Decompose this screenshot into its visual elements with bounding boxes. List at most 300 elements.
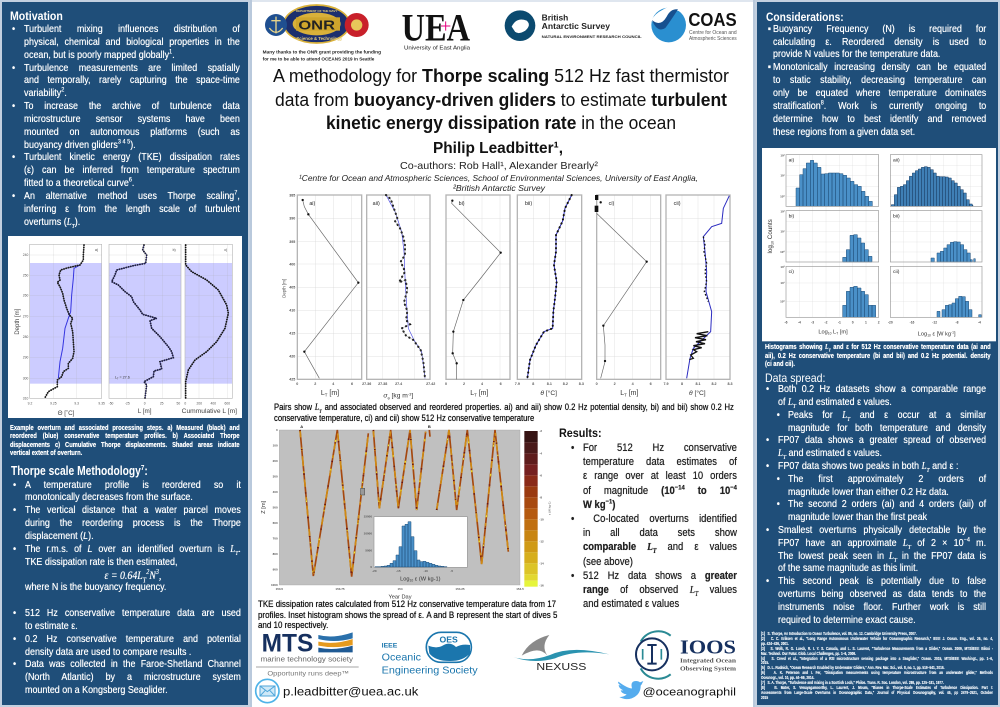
chart: histograms of LT and epsilon: 10 — [770, 241, 774, 245]
text block: Thorpe scale method bullets: 512 Hz conservative temperature data are used — [25, 608, 241, 619]
plot a: temperature profiles: 280 — [23, 335, 28, 339]
chart: histograms of LT and epsilon: 10¹ — [780, 230, 784, 234]
heading: Motivation: Motivation — [10, 9, 63, 23]
plot cii: 8.3 — [727, 382, 733, 386]
chart: TKE dissipation rate section: 154.5 — [516, 587, 524, 591]
text block: motivation bullets: inferring ε from the length scale of turbulent — [24, 204, 240, 215]
plot b: Thorpe displacements: 50 — [176, 401, 180, 405]
text block: motivation bullets: mounted on autonomous platforms (such as — [24, 127, 240, 138]
text block: Thorpe scale method bullets: where N is the buoyancy frequency. — [25, 582, 166, 593]
chart: TKE dissipation rate section: 800 — [273, 552, 278, 556]
logo: ONR — [263, 5, 381, 61]
plot cii: θ [°C] — [689, 389, 706, 397]
text block: motivation bullets: An alternative method uses Thorpe scaling7, — [24, 190, 240, 202]
logo: British Antarctic Survey — [505, 10, 643, 41]
histogram ai: ai) — [788, 158, 794, 164]
text block: results bullets: and estimated ε values — [583, 598, 679, 610]
chart: histograms of LT and epsilon: 10⁰ — [780, 195, 785, 199]
plot ai: 390 — [289, 217, 295, 221]
chart: TKE dissipation rate section: 300 — [273, 474, 278, 478]
plot bi: 0 — [445, 382, 447, 386]
logo: IEEE Oceanic Engineering Society — [382, 632, 479, 676]
logo: ONR: Many thanks to the ONR grant providing the funding — [263, 50, 381, 55]
plot b: Thorpe displacements: = 27.6 — [118, 376, 130, 380]
text block: considerations bullets: Buoyancy Frequency (N) is required for — [773, 24, 986, 35]
plot c: cumulative Thorpe displacements: 400 — [211, 401, 216, 405]
panel: centre column: • — [571, 570, 574, 582]
caption: dissipation section: and 10 respectively. — [258, 619, 328, 630]
text block: motivation bullets: (ε) can be inferred from temperature spectrum — [24, 165, 240, 176]
text block: Thorpe scale method bullets: Data was collected in the Faroe-Shetland Channel — [25, 659, 241, 670]
colour bar: -14 — [539, 561, 544, 565]
panel: right column: ▪ — [768, 24, 771, 35]
icon: twitter bird — [618, 681, 643, 699]
chart: histograms of LT and epsilon: -3 — [811, 321, 814, 325]
text block: motivation bullets: overturns (LT). — [24, 217, 80, 230]
logo: NEXUSS: NEXUSS — [536, 662, 586, 673]
text block: Thorpe scale method bullets: mounted on a Kongsberg Seaglider. — [25, 685, 168, 696]
logo: ONR: Science & Technology — [296, 36, 343, 41]
text block: results bullets: comparable LT and ε values — [583, 541, 737, 556]
text block: Thorpe scale method bullets: The vertical distance that a water parcel moves — [25, 505, 241, 516]
co-authors: Co-authors: Rob Hall¹, Alexander Brearly² — [400, 160, 599, 172]
caption: histograms: aii), 0.2 Hz conservative temperature (bi and bii) and 0.2 Hz potential. density — [765, 351, 991, 360]
references list: [8] B. Mater, S. Venayagamoorthy, L. Laurent, J. Moum, "Biases in Thorpe-Scale Estimates of Turbulence Dissipation. Part I: — [761, 685, 993, 690]
plot bi: 4 — [481, 382, 484, 386]
plot bii: 8.2 — [563, 382, 568, 386]
chart: TKE dissipation rate section: 0 — [276, 428, 278, 432]
histogram ai — [786, 155, 878, 207]
inset histogram of epsilon: -15 — [396, 569, 401, 573]
heading: Considerations: Considerations: — [766, 10, 844, 24]
text block: motivation bullets: and temporally, rarely capturing the space-time — [24, 75, 240, 86]
plot c: cumulative Thorpe displacements: 200 — [197, 401, 202, 405]
chart: TKE dissipation rate section: 153.5 — [276, 587, 283, 591]
panel: left column: • — [13, 608, 16, 619]
plot aii: σ — [383, 393, 388, 400]
plot a: temperature profiles: 270 — [23, 314, 28, 318]
text block: motivation bullets: Turbulent kinetic energy (TKE) dissipation rates — [24, 152, 240, 163]
glider dive tracks — [300, 430, 508, 577]
panel: left column: • — [13, 480, 16, 491]
heading: Thorpe scale Methodology: Thorpe scale Methodology7: — [11, 463, 148, 478]
title — [273, 65, 729, 133]
plot cii: 8.2 — [711, 382, 717, 386]
chart: histograms of LT and epsilon: Log — [917, 332, 927, 338]
logo: ONR: ONR — [298, 18, 335, 32]
text block: motivation bullets: physical, chemical and biological properties in the — [24, 37, 240, 48]
text block: data spread bullets: Smallest overturns physically detectable by the — [778, 525, 986, 536]
colour bar: -6 — [539, 473, 542, 477]
text block: Thorpe scale method bullets: The r.m.s. of L over an identified overturn is LT. — [25, 544, 241, 557]
chart: histograms of LT and epsilon: 10 — [827, 332, 831, 336]
chart: example overturn processing steps — [8, 236, 242, 418]
text block: motivation bullets: Turbulence measurements are limited spatially — [24, 63, 240, 74]
plot a: temperature profiles: 9.35 — [98, 401, 105, 405]
plot ci: T — [624, 393, 627, 398]
caption: dissipation section — [258, 598, 558, 630]
histogram ci — [786, 267, 878, 318]
logo: IOOS: Integrated Ocean — [680, 659, 737, 665]
logo: British Antarctic Survey: Antarctic Survey — [542, 21, 610, 31]
caption: profile pairs: Pairs show LT and associated observed and reordered properties. ai) and aii) show 0.2 Hz potential density, bi) and bii) show 0.2 Hz — [274, 402, 734, 415]
chart: histograms of LT and epsilon: 0 — [851, 321, 853, 325]
plot ci: 2 — [614, 382, 616, 386]
logo: British Antarctic Survey: NATURAL ENVIRONMENT RESEARCH COUNCIL — [542, 35, 643, 39]
plot ai: L — [321, 390, 325, 397]
panel: left column: • — [12, 24, 15, 35]
caption: histograms — [764, 342, 991, 368]
histogram bi: bi) — [788, 214, 794, 220]
logo: IEEE Oceanic Engineering Society: Oceanic — [382, 652, 421, 663]
sponsor logos row — [262, 4, 737, 61]
text block: results bullets: For 512 Hz conservative — [583, 442, 737, 454]
plot ai: 395 — [289, 240, 295, 244]
chart: histograms of LT and epsilon: -20 — [888, 321, 893, 325]
text block: data spread bullets: FP07 have an approximate LT of 2 × 10−4 m. — [778, 536, 986, 551]
text block: results bullets: ε range over at least 10 orders — [583, 470, 737, 482]
chart: histograms of LT and epsilon: -12 — [932, 321, 937, 325]
text block: Thorpe scale method bullets — [13, 480, 241, 696]
plot ci: 4 — [632, 382, 635, 386]
chart: TKE dissipation rate section: A — [300, 424, 303, 429]
plot b: Thorpe displacements: 0 — [144, 401, 146, 405]
references list: [4] S. Creed et al., "Integration of a RSI microstructure sensing package into a Seaglider," Ocean. 2015, MTS/IEEE Washingt., pp. 1–6, — [761, 656, 993, 661]
text block: results bullets: 512 Hz data shows a greater — [583, 570, 737, 582]
text block: motivation bullets: To increase the archive of turbulence data — [24, 101, 240, 112]
title: A methodology for Thorpe scaling 512 Hz fast thermistor — [273, 65, 729, 86]
logo: NEXUSS — [513, 635, 609, 673]
colour bar: -12 — [539, 539, 544, 543]
partner logos and contacts — [254, 630, 737, 704]
chart: histograms of LT and epsilon: 10² — [780, 210, 784, 214]
chart: histograms of LT and epsilon: ] — [954, 332, 956, 338]
text block: considerations bullets — [768, 24, 986, 138]
plot aii: 27.42 — [426, 382, 435, 386]
panel: left column — [0, 0, 250, 707]
text block: considerations bullets: stratification8. Work is currently ongoing to — [773, 100, 986, 112]
chart: histograms of LT and epsilon: -1 — [951, 331, 954, 335]
plot aii: θ — [387, 395, 390, 400]
references list: 2015. — [761, 660, 769, 665]
references list: 2015 — [761, 695, 768, 700]
inset histogram of epsilon: -5 — [450, 569, 453, 573]
author: Philip Leadbitter¹, — [433, 140, 563, 157]
plot ai: 400 — [289, 262, 295, 266]
panel: centre column: • — [571, 513, 574, 525]
logo: COAS: Atmospheric Sciences — [689, 36, 737, 42]
text block: data spread bullets: FP07 data shows a greater spread of observed — [778, 435, 986, 446]
chart: TKE dissipation rate section: Year Day — [388, 595, 412, 601]
panel: left column: • — [12, 63, 15, 74]
text block: motivation bullets: ocean, but is poorly mapped globally1. — [24, 48, 175, 61]
plot bi: 2 — [463, 382, 465, 386]
logo: COAS — [651, 7, 737, 42]
text block: results bullets — [571, 442, 738, 610]
plot b: Thorpe displacements — [109, 244, 181, 415]
logo: British Antarctic Survey: British — [542, 13, 568, 23]
plot ai: 0 — [296, 382, 298, 386]
plot c: cumulative Thorpe displacements: 600 — [225, 401, 230, 405]
affiliations — [299, 173, 698, 193]
plot a: temperature profiles: 9.25 — [50, 401, 57, 405]
plot ci: ci) — [609, 201, 615, 207]
logo: IOOS: IOOS — [680, 636, 736, 658]
text block: results bullets: of magnitude (10−14 to 10−4 — [583, 484, 737, 497]
title: data from buoyancy-driven gliders to estimate turbulent — [275, 89, 727, 110]
plot ci: 0 — [596, 382, 598, 386]
text block: motivation bullets: Turbulent mixing influences distribution of — [24, 24, 240, 35]
plot bii: bii) — [525, 201, 532, 207]
panel: right column — [755, 0, 1000, 707]
plot bii: 7.9 — [515, 382, 520, 386]
references list: [5] D. L. Rudnick, "Ocean Research Enabled by Underwater Gliders," Ann. Rev. Mar. Sci., vol. 8, no. 1, pp. 519–541, 2016. — [761, 665, 945, 670]
plot cii: 7.9 — [663, 382, 669, 386]
plot bi: 6 — [500, 382, 502, 386]
chart: histograms of LT and epsilon: 10² — [780, 154, 784, 158]
plot ai: 2 — [314, 382, 316, 386]
colour bar: ε (W kg-1) — [548, 501, 552, 515]
chart: histograms of LT and epsilon: 10 — [927, 334, 931, 338]
text block: data spread bullets: Both 0.2 Hz datasets show a comparable range — [778, 384, 986, 395]
text block: data spread bullets: This second peak is potentially due to false — [778, 576, 986, 587]
heading: Data spread: Data spread: — [765, 371, 825, 385]
histogram bi — [786, 211, 878, 262]
plot cii: 8 — [681, 382, 683, 386]
plot ci — [595, 195, 661, 398]
chart: histograms of LT and epsilon: 10⁰ — [780, 250, 785, 254]
inset histogram of epsilon: 0 — [370, 565, 372, 569]
text block: data spread bullets: overturns being observed as data tends to the — [778, 589, 986, 600]
logo: MTS: marine technology society — [261, 657, 354, 664]
chart: histograms of LT and epsilon: -4 — [798, 321, 801, 325]
logo: University of East Anglia: UEA — [402, 6, 470, 50]
text block: data spread bullets: magnitude for both temperature and density — [788, 423, 986, 434]
text block: considerations bullets: Monotonically increasing density can be equated — [773, 62, 986, 73]
caption: profile pairs — [274, 402, 734, 424]
plot ai: 420 — [289, 355, 295, 359]
logo: IEEE Oceanic Engineering Society: OES — [440, 634, 458, 644]
email address: p.leadbitter@uea.ac.uk — [283, 686, 419, 699]
plot c: cumulative Thorpe displacements: c) — [224, 248, 227, 252]
chart: TKE dissipation rate section: B — [428, 424, 431, 429]
text block: results bullets: (see above) — [583, 556, 633, 568]
references list: pp. 424–436, 2001. — [761, 641, 789, 646]
plot bi: T — [474, 393, 477, 398]
text block: results bullets: in all data sets show — [583, 527, 737, 539]
panel: left column: • — [13, 634, 16, 645]
logo: IEEE Oceanic Engineering Society: IEEE — [382, 642, 398, 649]
chart: TKE dissipation rate section: 200 — [273, 459, 278, 463]
logo: MTS: Opportunity runs deep™ — [267, 671, 349, 678]
logo: MTS: MTS — [262, 630, 313, 658]
plot b: Thorpe displacements: 25 — [160, 401, 164, 405]
plot a: temperature profiles: a) — [95, 248, 98, 252]
text block: Thorpe scale method bullets: A temperature profile is reordered so it — [25, 480, 241, 491]
caption: dissipation section: profiles. Inset histogram shows the spread of ε. A and B represent the start of dives 5 — [258, 609, 557, 620]
plot a: temperature profiles: 260 — [23, 294, 28, 298]
references list: [3] S. Wolk, R. G. Lueck, R. I. Y. S. Canada, and L. S. Laurent, "Turbulence Measurements from a Glider," Ocean. 2009, MTS/IEEE Biloxi - — [761, 646, 993, 651]
plot b: Thorpe displacements: -50 — [109, 401, 114, 405]
chart: TKE dissipation rate section: 900 — [273, 567, 278, 571]
text block: data spread bullets: instruments noise floor. Further work is still — [778, 602, 986, 613]
panel: right column: • — [766, 576, 769, 587]
text block: data spread bullets: • — [777, 474, 780, 485]
chart: histograms of LT and epsilon: 10² — [780, 265, 784, 269]
text block: data spread bullets: required to determine exact cause. — [778, 615, 916, 626]
logo: University of East Anglia: University of East Anglia — [404, 46, 471, 52]
logo: COAS: COAS — [688, 9, 737, 30]
plot ai: [m] — [327, 390, 339, 397]
inset histogram of epsilon: 5000 — [365, 548, 372, 552]
histogram ci: ci) — [788, 269, 794, 275]
caption: dissipation section: TKE dissipation rates calculated from 512 Hz conservative temperature data from 17 — [258, 598, 556, 609]
panel: left column: • — [13, 505, 16, 516]
plot ai: T — [325, 393, 328, 398]
plot aii: -3 — [408, 392, 412, 397]
chart: TKE dissipation rate section: Z [m] — [261, 500, 267, 514]
twitter handle: @oceanographil — [643, 687, 736, 699]
text block: considerations bullets: provide N values for the temperature data. — [773, 49, 940, 60]
plot cii — [663, 195, 733, 397]
chart: histograms of LT and epsilon: -8 — [955, 321, 958, 325]
histogram aii — [890, 155, 982, 207]
panel: right column: • — [766, 461, 769, 472]
colour bar: -10 — [539, 517, 544, 521]
logo: COAS: Centre for Ocean and — [689, 30, 737, 36]
text block: Thorpe scale method bullets: during the reordering process is the Thorpe — [25, 518, 241, 529]
plot aii: ] — [411, 393, 413, 400]
plot aii: [kg m — [390, 393, 408, 400]
plot ai: 4 — [332, 382, 335, 386]
panel: left column: • — [13, 659, 16, 670]
chart: histograms of LT and epsilon: 1 — [865, 321, 867, 325]
colour bar: -16 — [539, 584, 544, 588]
plot bii — [515, 195, 584, 397]
plot bi: L — [470, 390, 474, 397]
plot bi — [445, 195, 510, 398]
chart: histograms of LT and epsilon: T — [836, 332, 838, 336]
text block: motivation bullets: variability2. — [24, 87, 67, 99]
title and authors — [273, 65, 729, 193]
inset histogram of epsilon: Log — [400, 576, 410, 582]
plot a: temperature profiles: 290 — [23, 356, 28, 360]
plot b: Thorpe displacements: L — [115, 376, 117, 380]
text block: data spread bullets: • — [777, 499, 780, 510]
chart: histograms of LT and epsilon: 2 — [877, 321, 879, 325]
chart: TKE dissipation rate section: 500 — [273, 505, 278, 509]
text block: results bullets: W kg−1) — [583, 498, 615, 511]
plot ai: 415 — [289, 332, 295, 336]
heading: Results: Results: — [559, 426, 602, 440]
text block: considerations bullets: calculating ε. Reordered density is used to — [773, 36, 986, 48]
panel: right column: • — [766, 384, 769, 395]
plot ai: 385 — [289, 194, 295, 198]
chart: TKE dissipation rate section: 100 — [273, 444, 278, 448]
inset histogram of epsilon: 15000 — [364, 515, 372, 519]
plot a: temperature profiles: Depth [m] — [15, 308, 21, 335]
histogram bii — [890, 211, 982, 262]
text block: considerations bullets: only be equated where temperature dominates — [773, 88, 986, 99]
plot c: cumulative Thorpe displacements: 0 — [184, 401, 186, 405]
plot ai: 6 — [351, 382, 353, 386]
plot cii: cii) — [674, 201, 681, 207]
text block: considerations bullets: determine how to best identify and removed — [773, 114, 986, 125]
plot bii: θ [°C] — [540, 389, 557, 397]
text block: Thorpe scale method bullets: (North Atlantic) by a microstructure system — [25, 672, 241, 683]
chart: histograms of LT and epsilon: Log — [818, 330, 827, 336]
logo: MTS — [256, 630, 359, 678]
plot ci: 6 — [650, 382, 652, 386]
text block: data spread bullets: The lowest peak seen in LT in the FP07 data is — [778, 551, 986, 564]
plot aii: 27.38 — [378, 382, 387, 386]
plot a: temperature profiles: 9.2 — [28, 401, 32, 405]
caption: example overturn: reordered (blue) conservative temperature profiles. b) Associated Thorpe — [10, 431, 240, 440]
panel: right column: ▪ — [768, 62, 771, 73]
histogram cii — [890, 267, 982, 318]
text block: data spread bullets: Peaks for LT and ε occur at a similar — [788, 410, 986, 423]
caption: example overturn — [10, 422, 240, 457]
chart: TKE dissipation rate section — [261, 424, 552, 601]
panel: right column: • — [766, 525, 769, 536]
chart: TKE dissipation rate section: 600 — [273, 521, 278, 525]
plot ai: 405 — [289, 286, 295, 290]
plot c: cumulative Thorpe displacements: Cummulative L [m] — [182, 408, 237, 415]
text block: results bullets: range of observed LT values — [583, 584, 737, 598]
colour bar: -4 — [539, 451, 542, 455]
histogram bii: bii) — [893, 214, 900, 220]
caption: example overturn: vertical extent of overturn. — [10, 448, 82, 457]
text block: considerations bullets: to static stability, decreasing temperature can — [773, 75, 986, 86]
text block: data spread bullets: • — [777, 410, 780, 421]
plot bii: 8.3 — [579, 382, 584, 386]
plot ci: L — [620, 390, 624, 397]
inset histogram of epsilon: ε (W kg-1) — [413, 576, 441, 582]
chart: TKE dissipation rate section: 1000 — [271, 583, 278, 587]
caption: profile pairs: conservative temperature, ci) and cii) show 512 Hz conservative temperature — [274, 412, 534, 422]
panel: centre column — [250, 0, 755, 707]
references list: Mar. Technol. Our Futur. Glob. Local Challenges, pp. 1–6, 2009. — [761, 651, 856, 656]
caption: histograms: (ci and cii). — [765, 359, 795, 368]
references list: [7] S. A. Thorpe, "Turbulence and mixing in a Scottish Loch," Philos. Trans. R. Soc. London, vol. 286, pp. 125–181, 1977. — [761, 680, 944, 685]
chart: histograms of LT and epsilon: -4 — [978, 321, 981, 325]
plot aii: 27.36 — [362, 382, 371, 386]
chart: histograms of LT and epsilon: -2 — [824, 321, 827, 325]
text block: motivation bullets: buoyancy driven gliders3 4 5). — [24, 138, 136, 151]
references list: [6] A. K. Peterson and I. Fer, "Dissipation measurements using temperature microstructure from an underwater glider," Methods — [761, 670, 993, 675]
title: kinetic energy dissipation rate in the ocean — [326, 112, 676, 133]
plot a: temperature profiles: Θ [˚C] — [58, 409, 75, 417]
chart: histograms of LT and epsilon: -6 — [784, 321, 787, 325]
plot bi: [m] — [477, 390, 488, 397]
panel: right column: • — [766, 435, 769, 446]
panel: centre column: • — [571, 442, 574, 454]
histogram cii: cii) — [893, 269, 899, 275]
plot a: temperature profiles: 250 — [23, 273, 28, 277]
plot b: Thorpe displacements: T — [117, 379, 119, 381]
text block: data spread bullets — [766, 384, 986, 626]
panel: left column: • — [12, 101, 15, 112]
chart: histograms of LT and epsilon: 10¹ — [780, 174, 784, 178]
text block: results bullets: temperature data estimates of — [583, 456, 737, 468]
panel: left column: • — [13, 544, 16, 555]
chart: histograms of LT and epsilon: Counts — [767, 219, 774, 241]
inset histogram of epsilon — [360, 511, 470, 583]
plot bii: 8 — [532, 382, 534, 386]
text block: Thorpe scale method bullets: density data are used to compare results . — [25, 647, 191, 658]
plot cii: 8.1 — [695, 382, 701, 386]
panel: left column: • — [12, 152, 15, 163]
